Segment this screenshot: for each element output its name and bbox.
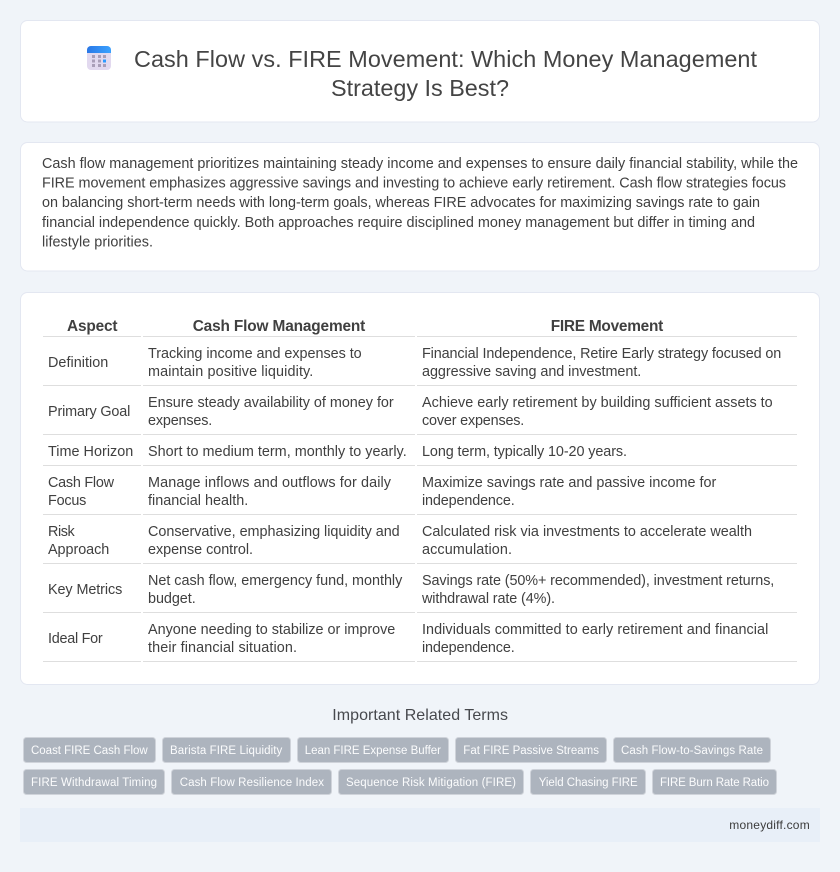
tag: Yield Chasing FIRE: [530, 770, 646, 794]
title: Strategy Is Best?: [331, 75, 509, 101]
table row: key metrics: Savings rate (50%+ recommended), investment returns,: [422, 573, 774, 589]
tag: Yield Chasing FIRE: Yield Chasing FIRE: [539, 777, 638, 789]
table header row: FIRE Movement: [551, 318, 663, 335]
table row: risk approach: Calculated risk via investments to accelerate wealth: [422, 524, 752, 540]
table header row: Aspect: [67, 318, 118, 335]
table row: cash flow focus: independence.: [422, 493, 515, 509]
tag: Fat FIRE Passive Streams: [456, 738, 606, 762]
footer source text: moneydiff.com: [729, 818, 810, 832]
table row: primary goal: expenses.: [148, 413, 212, 429]
table row: ideal for: Ideal For: [48, 631, 103, 647]
text block: introduction paragraph: financial independence quickly. Both approaches require disciplined money management but differ in timing and: [42, 215, 755, 231]
table row: risk approach: [48, 524, 752, 558]
table row: definition: [48, 346, 781, 380]
table row: key metrics: withdrawal rate (4%).: [421, 591, 555, 607]
panel: related term tags: [24, 738, 776, 794]
tag: Lean FIRE Expense Buffer: [298, 738, 448, 762]
table row: ideal for: Anyone needing to stabilize or improve: [148, 622, 395, 638]
table row: definition: Financial Independence, Retire Early strategy focused on: [422, 346, 781, 362]
panel: comparison table: [20, 292, 820, 684]
table row: definition: Tracking income and expenses to: [148, 346, 362, 362]
table row: ideal for: their financial situation.: [148, 640, 297, 656]
tag: Barista FIRE Liquidity: Barista FIRE Liquidity: [170, 745, 283, 757]
table row: risk approach: Conservative, emphasizing liquidity and: [148, 524, 400, 540]
tag: Coast FIRE Cash Flow: [24, 738, 156, 762]
table row: key metrics: Key Metrics: [48, 582, 122, 598]
table row: cash flow focus: Focus: [48, 493, 86, 509]
footer bar: [20, 808, 820, 842]
table row: cash flow focus: Manage inflows and outflows for daily: [148, 475, 392, 491]
table row: time horizon: Time Horizon: [48, 444, 133, 460]
table header row: [67, 318, 663, 335]
table row: cash flow focus: financial health.: [148, 493, 248, 509]
tag: Cash Flow Resilience Index: [172, 770, 332, 794]
table row: definition: Definition: [48, 355, 108, 371]
text block: introduction paragraph: [42, 156, 798, 250]
table row: cash flow focus: Cash Flow: [48, 475, 115, 491]
table row: primary goal: Primary Goal: [48, 404, 130, 420]
table row: primary goal: cover expenses.: [422, 413, 524, 429]
title: [134, 46, 758, 101]
table row: key metrics: budget.: [148, 591, 196, 607]
panel: header: [20, 20, 820, 122]
table row: ideal for: [48, 622, 768, 656]
table row: time horizon: Short to medium term, monthly to yearly.: [148, 444, 407, 460]
table row: risk approach: Risk: [48, 524, 75, 540]
table row: risk approach: expense control.: [148, 542, 253, 558]
tag: Sequence Risk Mitigation (FIRE): [338, 770, 524, 794]
tag: Coast FIRE Cash Flow: Coast FIRE Cash Flow: [31, 745, 148, 757]
table row: definition: maintain positive liquidity.: [148, 364, 313, 380]
tag: Barista FIRE Liquidity: [162, 738, 290, 762]
tag: Cash Flow-to-Savings Rate: [614, 738, 770, 762]
table row: key metrics: Net cash flow, emergency fund, monthly: [148, 573, 403, 589]
table row: primary goal: Achieve early retirement by building sufficient assets to: [422, 395, 773, 411]
icon: calendar: [87, 46, 111, 70]
tag: Lean FIRE Expense Buffer: Lean FIRE Expense Buffer: [305, 745, 441, 757]
table row: key metrics: [48, 573, 774, 607]
tag: Sequence Risk Mitigation (FIRE): Sequence Risk Mitigation (FIRE): [346, 777, 516, 789]
text block: introduction paragraph: FIRE movement emphasizes aggressive savings and investing to achieve early retirement. Cash flow strategies focus: [42, 176, 786, 192]
tag: FIRE Withdrawal Timing: [24, 770, 164, 794]
text block: introduction paragraph: lifestyle priorities.: [42, 234, 153, 250]
table row: ideal for: independence.: [422, 640, 515, 656]
tag: Cash Flow-to-Savings Rate: Cash Flow-to-Savings Rate: [621, 745, 763, 757]
table row: definition: aggressive saving and investment.: [422, 364, 641, 380]
text block: introduction paragraph: Cash flow management prioritizes maintaining steady income and expenses to ensure daily financial stability, while the: [42, 156, 798, 172]
tag: FIRE Burn Rate Ratio: FIRE Burn Rate Ratio: [660, 777, 769, 789]
tag: Cash Flow Resilience Index: Cash Flow Resilience Index: [180, 777, 324, 789]
table row: time horizon: Long term, typically 10-20 years.: [422, 444, 627, 460]
table row: primary goal: [48, 395, 773, 429]
text block: introduction paragraph: on balancing short-term needs with long-term goals, whereas FIRE advocates for maximizing savings rate to gain: [42, 195, 760, 211]
table row: risk approach: accumulation.: [422, 542, 512, 558]
table row: time horizon: [48, 444, 627, 460]
tag: Fat FIRE Passive Streams: Fat FIRE Passive Streams: [463, 745, 599, 757]
table row: ideal for: Individuals committed to early retirement and financial: [422, 622, 768, 638]
table row: cash flow focus: Maximize savings rate and passive income for: [422, 475, 717, 491]
tag: FIRE Withdrawal Timing: FIRE Withdrawal Timing: [31, 777, 157, 789]
table row: cash flow focus: [48, 475, 717, 509]
title: Cash Flow vs. FIRE Movement: Which Money Management: [134, 46, 758, 72]
tag: FIRE Burn Rate Ratio: [652, 770, 776, 794]
table row: primary goal: Ensure steady availability of money for: [148, 395, 394, 411]
table row: risk approach: Approach: [48, 542, 109, 558]
panel: introduction: [20, 142, 820, 271]
table header row: Cash Flow Management: [193, 318, 365, 335]
heading: important related terms: Important Related Terms: [332, 707, 508, 724]
